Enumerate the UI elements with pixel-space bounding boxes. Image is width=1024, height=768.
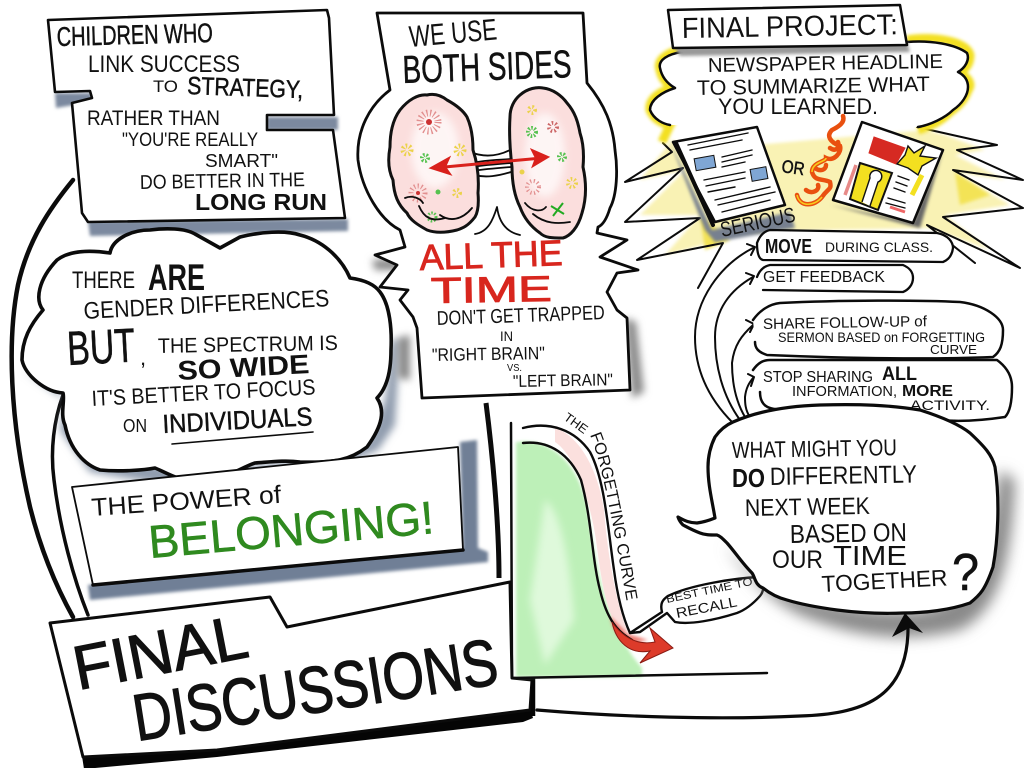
panel: brain, we use both sides [358, 13, 644, 398]
item: get feedback: GET FEEDBACK [763, 269, 885, 286]
panel: children who link success to strategy: RATHER THAN [87, 107, 220, 130]
connector: vertical line below brain panel [486, 403, 499, 578]
text: don't get trapped [432, 302, 613, 391]
text: don't get trapped: DON'T GET TRAPPED [436, 302, 605, 330]
item: stop sharing all information: ALL [882, 364, 917, 385]
item: move during class: MOVE [765, 236, 812, 258]
chart area: green [516, 441, 642, 677]
label: the forgetting curve [561, 410, 638, 600]
panel: what might you do differently speech bubble: ? [952, 544, 979, 602]
heading: final project: FINAL PROJECT: [682, 9, 898, 45]
arrow: double-headed red arrow [431, 150, 548, 174]
arrow: connector from final discussions to speech bubble [537, 613, 923, 718]
panel: gender differences cloud: THERE [72, 267, 135, 294]
panel: list of ideas [695, 230, 1012, 423]
item: move during class [757, 230, 953, 262]
icon: brain [389, 88, 586, 238]
chart: the forgetting curve [510, 410, 768, 680]
label: serious: SERIOUS [718, 204, 797, 242]
label: the forgetting curve: FORGETTING CURVE [590, 432, 638, 600]
panel: what might you do differently speech bubble: TOGETHER [821, 564, 948, 597]
chart band: pink gradient [555, 428, 648, 644]
item: stop sharing all information: INFORMATION, [792, 383, 897, 400]
chart curves [523, 426, 632, 640]
panel: final discussions title: FINAL [68, 602, 253, 704]
text: don't get trapped: VS. [507, 363, 522, 374]
panel: gender differences cloud: , [140, 345, 146, 370]
callout: best time to recall [630, 576, 763, 633]
item: stop sharing all information: MORE [902, 383, 953, 400]
panel: children who link success to strategy: DO BETTER IN THE [140, 169, 305, 194]
icon: tabloid newspaper [830, 122, 943, 228]
heading: final project [668, 5, 910, 56]
text: don't get trapped: "LEFT BRAIN" [513, 370, 613, 391]
cloud: newspaper headline: YOU LEARNED. [718, 94, 878, 119]
item: move during class: DURING CLASS. [825, 239, 933, 255]
panel: gender differences cloud: SO WIDE [177, 349, 310, 386]
connector: long curves on the left [12, 180, 88, 617]
item: share follow-up of sermon: SERMON BASED on FORGETTING [778, 329, 985, 345]
arrow: red curve arrow [612, 622, 673, 663]
item: get feedback [757, 265, 913, 292]
cloud: newspaper headline: NEWSPAPER HEADLINE [708, 51, 943, 77]
item: share follow-up of sermon [753, 301, 1003, 358]
panel: gender differences cloud: INDIVIDUALS [162, 401, 313, 439]
text: don't get trapped: IN [500, 328, 513, 344]
icon: orange swirls [797, 116, 843, 204]
panel: gender differences cloud: BUT [66, 319, 136, 376]
text: all the time: TIME [430, 268, 552, 311]
label: the forgetting curve: THE [561, 410, 591, 437]
panel: the power of belonging [72, 440, 488, 600]
panel: what might you do differently speech bubble: WHAT MIGHT YOU [732, 434, 897, 463]
heading: we use both sides [402, 13, 572, 92]
panel: children who link success to strategy [48, 10, 348, 236]
item: stop sharing all information [753, 360, 1012, 421]
cloud: newspaper headline: TO SUMMARIZE WHAT [697, 73, 930, 100]
panel: what might you do differently speech bubble: DIFFERENTLY [770, 460, 917, 491]
panel: children who link success to strategy: CHILDREN WHO [56, 18, 213, 52]
chart axes [511, 423, 767, 678]
panel: what might you do differently speech bubble: NEXT WEEK [745, 493, 870, 522]
panel: what might you do differently speech bubble: BASED ON [790, 517, 907, 549]
text: or: OR [780, 156, 806, 179]
heading: we use both sides: BOTH SIDES [402, 43, 572, 92]
cloud: newspaper headline [650, 39, 970, 142]
panel: the power of belonging: BELONGING! [146, 491, 436, 568]
panel: what might you do differently speech bubble: DO [732, 463, 765, 493]
panel: children who link success to strategy: TO [153, 77, 178, 96]
panel: what might you do differently speech bubble: TIME [833, 540, 907, 571]
text: all the time [419, 232, 563, 311]
panel: children who link success to strategy: STRATEGY, [187, 72, 304, 104]
panel: final discussions title [50, 582, 533, 768]
panel: children who link success to strategy: "YOU'RE REALLY [122, 130, 258, 151]
item: share follow-up of sermon: SHARE FOLLOW-UP of [763, 313, 928, 333]
heading: we use both sides: WE USE [408, 13, 498, 54]
panel: children who link success to strategy: SMART" [205, 151, 278, 171]
panel: gender differences cloud: IT'S BETTER TO FOCUS [91, 374, 316, 411]
item: share follow-up of sermon: CURVE [930, 342, 977, 357]
panel: final discussions title: DISCUSSIONS [128, 624, 503, 755]
panel: children who link success to strategy: LINK SUCCESS [88, 51, 240, 78]
icon: serious newspaper [670, 127, 795, 242]
panel: what might you do differently speech bubble [678, 405, 1015, 637]
panel: gender differences cloud: ARE [148, 257, 205, 298]
panel: gender differences cloud [22, 229, 400, 490]
panel: what might you do differently speech bubble: OUR [772, 546, 823, 574]
burst: yellow explosion [625, 127, 1023, 288]
text: all the time: ALL THE [419, 232, 563, 278]
callout: best time to recall: RECALL [675, 593, 739, 621]
text: don't get trapped: "RIGHT BRAIN" [432, 343, 545, 365]
panel: gender differences cloud: GENDER DIFFERENCES [83, 285, 330, 325]
panel: gender differences cloud: ON [123, 416, 147, 436]
panel: the power of belonging: THE POWER of [90, 481, 282, 522]
callout: best time to recall: BEST TIME TO [665, 576, 754, 606]
item: stop sharing all information: STOP SHARING [763, 369, 873, 386]
item: stop sharing all information: ACTIVITY. [910, 397, 990, 413]
panel: gender differences cloud: THE SPECTRUM IS [158, 332, 338, 358]
arrows: curved list arrows [695, 244, 755, 423]
panel: children who link success to strategy: LONG RUN [195, 189, 327, 215]
panel: final project burst [625, 5, 1023, 288]
